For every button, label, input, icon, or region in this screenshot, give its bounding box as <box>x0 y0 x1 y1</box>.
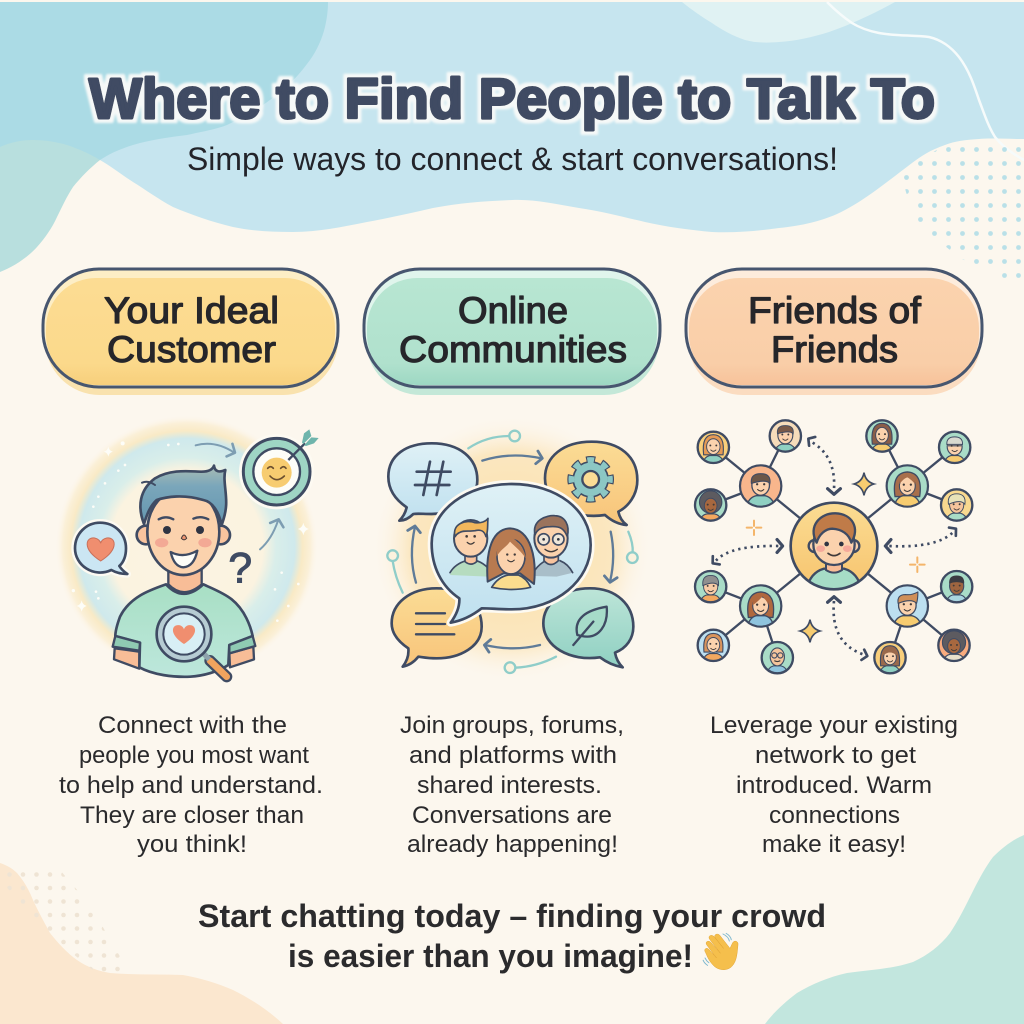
background dots: top-right <box>900 139 1024 278</box>
body text: Friends of Friends: Leverage your existing <box>710 712 958 739</box>
hair curl <box>142 482 155 485</box>
center avatar <box>791 503 877 589</box>
body text: Friends of Friends: introduced. Warm <box>736 772 932 799</box>
smile <box>171 551 197 567</box>
background dots: bottom-left <box>0 870 122 976</box>
character: man with magnifier <box>113 466 255 677</box>
pill heading: Your Ideal Customer: Customer <box>107 329 276 370</box>
face <box>147 488 219 575</box>
avatar: top-right cluster hub <box>887 465 928 507</box>
avatar: bottom-left cluster hub <box>740 585 781 627</box>
glow ring <box>55 415 318 678</box>
body text: Online Communities <box>400 712 624 858</box>
background blob: bottom-right mint <box>765 835 1024 1024</box>
person: woman <box>487 528 535 589</box>
icon: question mark: ? <box>228 545 252 593</box>
background blob: top-left teal <box>0 2 328 165</box>
teal connector nodes <box>387 431 638 673</box>
body text: Online Communities: already happening! <box>407 831 618 858</box>
avatar: top center-right <box>866 420 898 454</box>
background blob: top-right pale <box>682 2 895 43</box>
arrow to target <box>196 444 238 459</box>
body text: Friends of Friends <box>710 712 958 858</box>
connection lines <box>711 436 957 658</box>
pill heading: Online Communities: Online <box>458 290 568 331</box>
arrow rising <box>260 517 285 549</box>
body text: Friends of Friends: connections <box>769 802 900 829</box>
body text: Online Communities: Join groups, forums, <box>400 712 624 739</box>
avatar: far top-right <box>939 432 970 465</box>
avatar: far top-left <box>698 432 729 465</box>
bubble: hashtag <box>388 443 477 521</box>
avatar: lower-left woman <box>698 630 729 663</box>
footer call to action: Start chatting today – finding your crowd <box>198 898 826 934</box>
avatar: top center-left <box>770 420 801 454</box>
subtitle: Simple ways to connect & start conversations! <box>187 141 838 177</box>
illustration: online community bubbles <box>372 415 652 682</box>
avatar: left afro <box>695 489 726 523</box>
body text: Your Ideal Customer <box>59 712 323 858</box>
pill heading: Online Communities <box>364 269 660 395</box>
t-shirt <box>115 584 253 677</box>
sparkles <box>747 473 925 642</box>
avatar: lower center-right woman <box>874 642 906 676</box>
avatar: lower center-left glasses <box>762 642 793 676</box>
body text: Your Ideal Customer: Connect with the <box>98 712 287 739</box>
cheeks <box>155 538 168 547</box>
body text: Your Ideal Customer: to help and understand. <box>59 772 323 799</box>
sparkle dots <box>72 441 309 622</box>
main speech bubble <box>432 484 591 623</box>
sleeve cuffs <box>113 636 255 653</box>
bubble: text lines <box>392 588 482 667</box>
body text: Your Ideal Customer: They are closer than <box>80 802 304 829</box>
brows and eyes <box>159 517 208 519</box>
pill heading: Friends of Friends <box>686 269 982 395</box>
avatar: bottom-right cluster hub <box>887 585 928 627</box>
pill heading: Friends of Friends: Friends of <box>748 290 922 331</box>
avatar: top-left cluster hub <box>740 465 781 507</box>
ears <box>137 526 155 544</box>
small avatars <box>695 420 972 676</box>
body text: Your Ideal Customer: people you most want <box>79 742 309 769</box>
body text: Friends of Friends: make it easy! <box>762 831 906 858</box>
footer call to action <box>198 898 826 974</box>
body text: Online Communities: shared interests. <box>417 772 602 799</box>
flow arrows <box>408 451 617 652</box>
pill heading: Friends of Friends: Friends <box>771 329 898 370</box>
hair <box>140 466 226 525</box>
footer call to action: is easier than you imagine! <box>288 938 693 974</box>
background blob: bottom-left peach <box>0 863 283 1024</box>
pill heading: Online Communities: Communities <box>399 329 627 370</box>
avatar: right blond <box>941 489 972 523</box>
neck <box>168 570 202 592</box>
icon: waving hand <box>703 933 738 970</box>
decorative white curve <box>827 2 1024 160</box>
glow <box>372 415 652 682</box>
bubble: leaf <box>543 588 633 667</box>
icon: heart speech bubble <box>75 523 127 574</box>
avatar: lower-right afro <box>938 630 970 663</box>
dotted double arrows <box>709 434 959 661</box>
illustration: person seeking ideal customer <box>55 415 319 678</box>
illustration: network of friends <box>695 420 972 676</box>
arms <box>114 647 254 669</box>
pill heading: Your Ideal Customer <box>43 269 338 395</box>
body text: Friends of Friends: network to get <box>755 742 916 769</box>
avatar: right dark-haired <box>941 571 972 605</box>
icon: target with smiley <box>239 429 319 509</box>
title: Where to Find People to Talk To <box>89 67 935 131</box>
pill heading: Your Ideal Customer: Your Ideal <box>104 290 279 331</box>
background blob: top blue wave <box>0 2 1024 232</box>
avatar: left grey-haired <box>695 571 726 605</box>
background blob: left teal sliver <box>0 140 100 272</box>
body text: Online Communities: and platforms with <box>409 742 617 769</box>
person: glasses man <box>534 516 573 577</box>
magnifier <box>157 607 227 677</box>
body text: Online Communities: Conversations are <box>412 802 612 829</box>
bubble: gear <box>545 442 637 525</box>
person: left man <box>450 518 488 577</box>
nose <box>181 535 187 540</box>
body text: Your Ideal Customer: you think! <box>137 831 247 858</box>
